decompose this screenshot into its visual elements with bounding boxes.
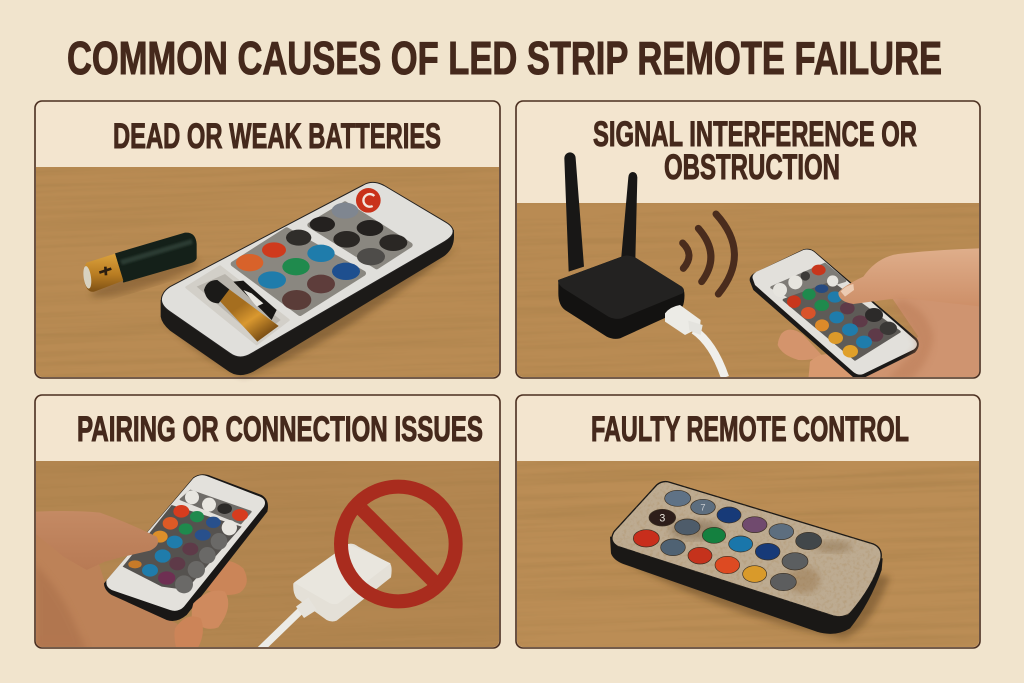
panel: signal interference or obstruction (515, 100, 981, 379)
panel 2 illustration (558, 152, 982, 380)
panel 3 border (35, 395, 500, 648)
button glyphs: 7 (700, 503, 706, 513)
thumb over remote (838, 248, 982, 307)
ring finger (174, 616, 203, 650)
panel 3 illustration (35, 474, 456, 650)
panel 1 illustration (82, 182, 458, 377)
icon: remote with open battery bay (161, 182, 458, 377)
remote buttons (633, 490, 822, 591)
panel 2 wood and header background (517, 102, 979, 377)
icon: worn dirty remote (607, 477, 890, 638)
button glyphs: 3 (659, 513, 665, 525)
panel 2 heading: OBSTRUCTION (664, 148, 840, 187)
remote keypad (772, 264, 899, 359)
panel 1 border (35, 101, 500, 378)
hand shading (36, 573, 82, 647)
thumbnail (841, 284, 854, 297)
panel 4 border (516, 395, 980, 648)
panel 4 illustration (607, 477, 890, 638)
panel 3 heading: PAIRING OR CONNECTION ISSUES (77, 410, 483, 449)
button glyphs (659, 503, 706, 525)
palm behind remote (866, 299, 979, 377)
remote buttons (236, 188, 407, 310)
panel: pairing or connection issues (34, 394, 501, 649)
panel: dead or weak batteries (34, 100, 501, 380)
remote body (104, 474, 268, 621)
hand shading (893, 302, 932, 377)
thumb over remote (36, 511, 158, 564)
panel 4 wood and header background (517, 396, 979, 647)
panel 1 heading: DEAD OR WEAK BATTERIES (113, 117, 441, 156)
finger behind remote (207, 561, 247, 595)
second lower finger (808, 354, 853, 377)
panel 2 heading (593, 115, 917, 187)
icon: remote in hand (35, 474, 268, 650)
battery bay (187, 267, 288, 344)
panel 2 border (516, 101, 980, 378)
remote body (750, 249, 919, 377)
icon: white connector and cable (260, 544, 392, 650)
panel: faulty remote control (515, 394, 981, 649)
icon: signal waves (683, 214, 734, 294)
icon: remote in hand (750, 248, 982, 380)
panel 3 wood and header background (36, 396, 499, 647)
icon: prohibition sign (341, 487, 456, 601)
panel 1 wood and header background (36, 102, 499, 377)
remote keypad (123, 490, 251, 593)
icon: router with antennas (558, 152, 684, 339)
icon: USB plug and white cable (665, 305, 725, 377)
lower fingers behind remote (778, 330, 822, 360)
middle finger over remote (192, 591, 228, 629)
icon: loose AA battery (82, 233, 202, 303)
palm behind remote (36, 534, 178, 647)
grime stains (607, 477, 887, 620)
